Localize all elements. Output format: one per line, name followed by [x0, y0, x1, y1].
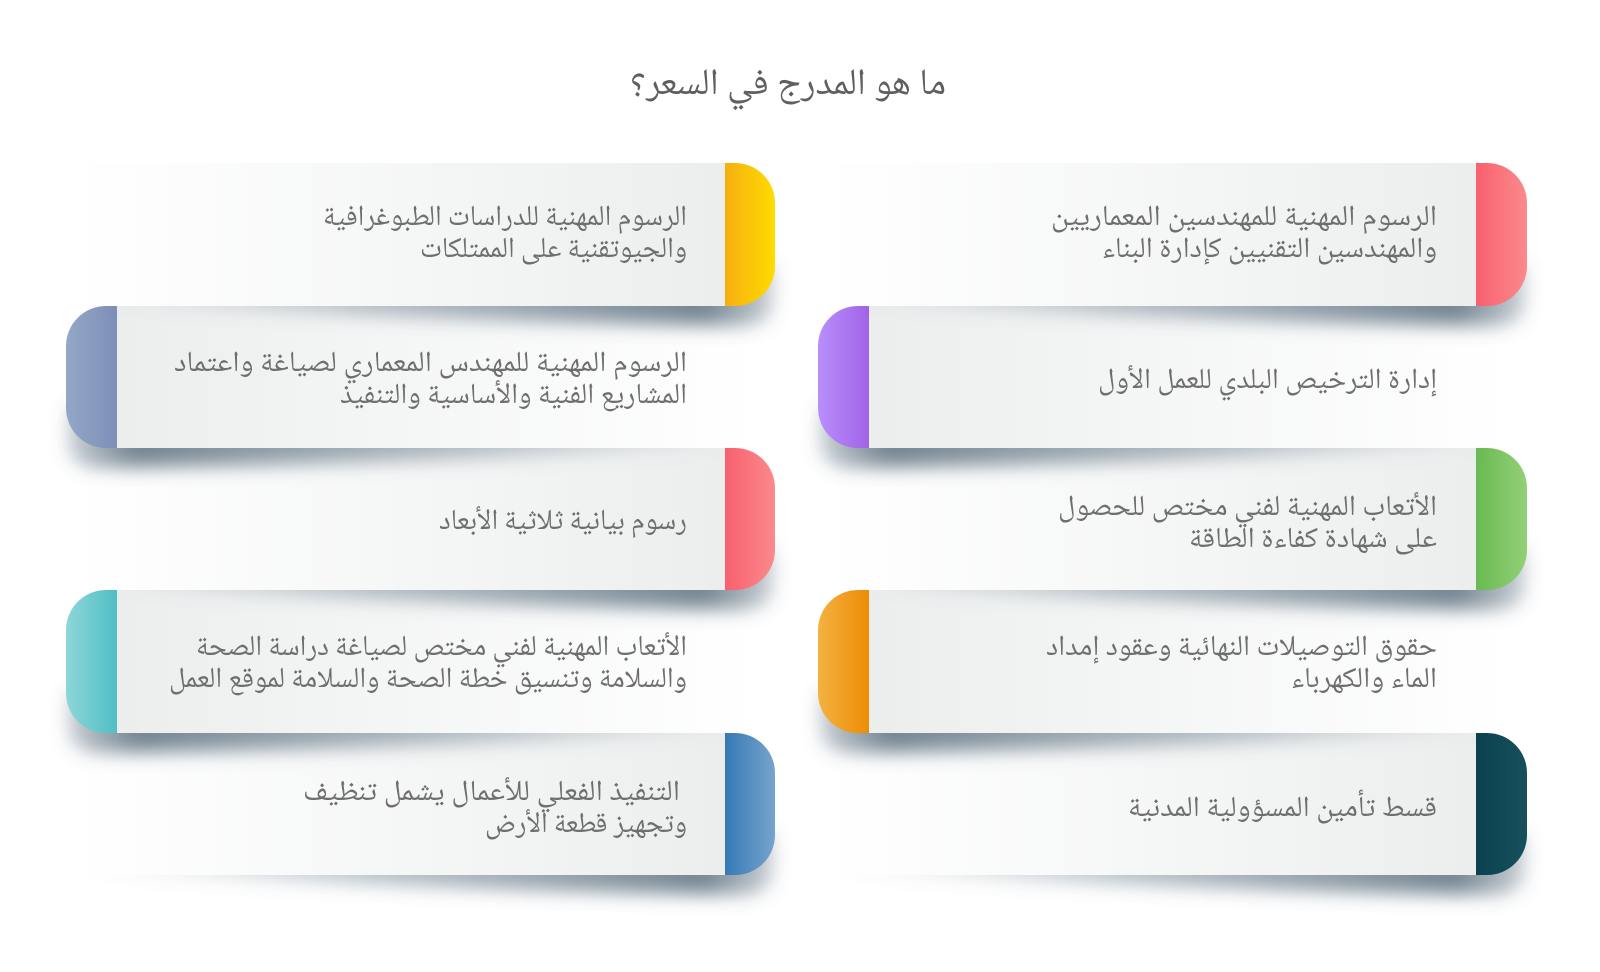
panel: card left 5: [75, 733, 775, 895]
panel: card right 4: حقوق التوصيلات النهائية وعقود إمداد: [1046, 625, 1437, 674]
panel: card left 4: الأتعاب المهنية لفني مختص لصياغة دراسة الصحة: [196, 625, 687, 674]
panel: card left 4: [66, 590, 757, 753]
panel: card right 5: [825, 733, 1527, 895]
panel: card right 3: الأتعاب المهنية لفني مختص للحصول: [1058, 485, 1437, 534]
panel: card right 1: والمهندسين التقنيين كإدارة البناء: [1102, 227, 1437, 276]
panel: card right 3: على شهادة كفاءة الطاقة: [1189, 517, 1437, 566]
panel: card left 5: التنفيذ الفعلي للأعمال يشمل تنظيف: [303, 770, 680, 819]
panel: card left 1: والجيوتقنية على الممتلكات: [420, 227, 687, 276]
panel: card left 3: [75, 448, 775, 610]
title: ما هو المدرج في السعر؟: [630, 55, 946, 118]
panel: card right 5: قسط تأمين المسؤولية المدنية: [1128, 786, 1437, 835]
panel: card left 3: رسوم بيانية ثلاثية الأبعاد: [439, 499, 687, 548]
panel: card left 4: والسلامة وتنسيق خطة الصحة والسلامة لموقع العمل: [169, 657, 687, 706]
panel: card right 1: الرسوم المهنية للمهندسين المعماريين: [1051, 195, 1437, 244]
panel: card left 2: المشاريع الفنية والأساسية والتنفيذ: [340, 373, 687, 422]
panel: card right 2: [818, 306, 1509, 468]
panel: card right 4: الماء والكهرباء: [1291, 657, 1437, 706]
panel: card left 1: الرسوم المهنية للدراسات الطبوغرافية: [323, 195, 687, 244]
panel: card left 5: وتجهيز قطعة الأرض: [485, 802, 687, 851]
panel: card left 2: [66, 306, 757, 468]
panel: card right 3: [825, 448, 1527, 610]
panel: card right 2: إدارة الترخيص البلدي للعمل الأول: [1098, 358, 1437, 407]
panel: card right 1: [825, 163, 1527, 326]
panel: card right 4: [818, 590, 1509, 753]
panel: card left 2: الرسوم المهنية للمهندس المعماري لصياغة واعتماد: [174, 341, 687, 390]
panel: card left 1: [75, 163, 775, 326]
